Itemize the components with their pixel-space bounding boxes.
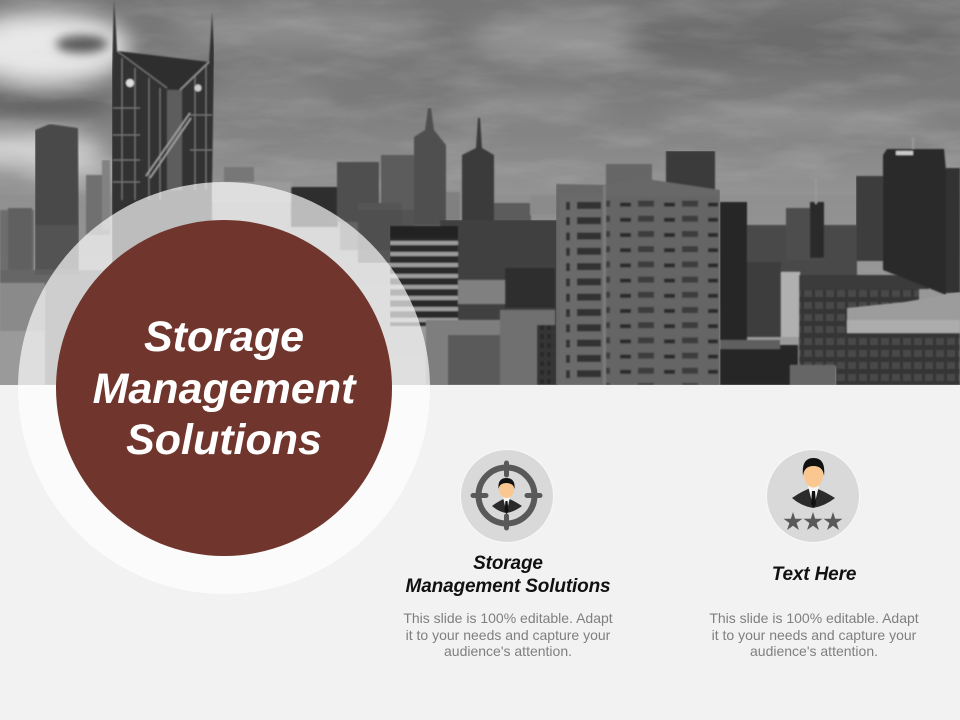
heading: Text Here: Text Here — [772, 564, 856, 585]
angular tall tower — [112, 0, 214, 385]
photo: city skyline — [0, 0, 960, 385]
distant haze band — [0, 195, 960, 255]
text block left: audience's attention. — [444, 643, 572, 659]
lower centre buildings — [390, 220, 558, 385]
left tower — [35, 124, 79, 275]
text block right: audience's attention. — [750, 643, 878, 659]
heading: Storage Management Solutions: Management Solutions — [406, 576, 610, 597]
right dark tower — [856, 137, 960, 295]
heading: Storage Management Solutions — [406, 553, 610, 597]
text block right: This slide is 100% editable. Adapt — [709, 610, 919, 626]
icon: target with businessman — [461, 450, 553, 542]
far left low buildings — [0, 160, 120, 385]
heading: Storage Management Solutions: Storage — [473, 553, 543, 574]
right-hand city blocks — [720, 178, 929, 385]
title: Management — [93, 364, 355, 412]
text block left: it to your needs and capture your — [406, 626, 610, 642]
text block right — [709, 610, 919, 659]
text block left: This slide is 100% editable. Adapt — [403, 610, 613, 626]
central residential tower — [556, 151, 720, 385]
text block left — [403, 610, 613, 659]
text block right: it to your needs and capture your — [712, 626, 916, 642]
title: Solutions — [126, 416, 322, 464]
right foreground building — [836, 292, 960, 385]
title — [93, 313, 357, 464]
icon: businessman with three stars — [767, 450, 859, 542]
mid skyline — [212, 108, 560, 263]
title: Storage — [144, 313, 304, 361]
